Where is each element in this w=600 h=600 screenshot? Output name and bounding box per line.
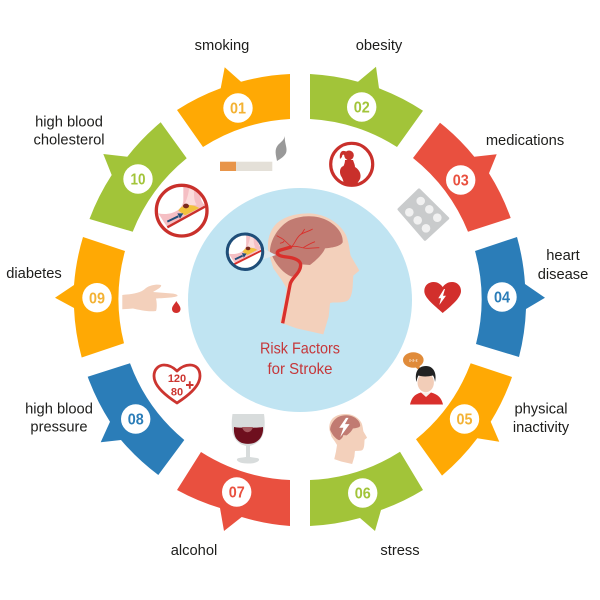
segment 10: high blood cholesterol: 10 — [130, 172, 146, 189]
segment 01: smoking: 01 — [230, 101, 246, 118]
segment 07: alcohol — [177, 452, 290, 531]
label: heart disease — [538, 248, 588, 283]
label: alcohol: alcohol — [171, 543, 217, 559]
icon: cigarette — [220, 136, 287, 171]
icon: finger with blood drop — [122, 285, 180, 313]
label: physical inactivity — [513, 402, 570, 436]
segment 10: high blood cholesterol — [90, 122, 187, 232]
segment 09: diabetes: 09 — [89, 290, 105, 307]
title: Risk Factors — [260, 340, 340, 357]
segment 07: alcohol: 07 — [229, 485, 245, 502]
label: high blood pressure: pressure — [30, 420, 88, 436]
segment 08: high blood pressure: 08 — [128, 412, 144, 429]
icon: wine glass — [232, 414, 265, 464]
label: high blood cholesterol: cholesterol — [33, 132, 105, 148]
zoom wedge — [264, 249, 276, 259]
segment 03: medications: 03 — [453, 173, 469, 190]
segment 04: heart disease: 04 — [494, 290, 510, 307]
segment 01: smoking — [177, 67, 290, 147]
label: medications: medications — [486, 133, 564, 149]
segment 02: obesity — [310, 67, 423, 147]
segment 09: diabetes — [55, 237, 125, 358]
icon: blood pressure heart: 80 — [171, 386, 183, 398]
icon: head with stressed brain — [329, 414, 367, 464]
label: heart disease: disease — [538, 267, 588, 283]
label: high blood pressure: high blood — [25, 401, 93, 417]
icon: artery crossed out — [156, 183, 207, 236]
label: high blood cholesterol: high blood — [35, 115, 103, 131]
icon: artery in navy circle — [227, 233, 263, 269]
label: obesity: obesity — [356, 38, 403, 54]
segment 08: high blood pressure — [88, 363, 184, 475]
label: high blood pressure — [25, 401, 93, 436]
icon: sleepy person: z-z-z — [409, 357, 418, 362]
title — [260, 340, 340, 378]
segment 05: physical inactivity: 05 — [456, 412, 473, 429]
segment 06: stress — [310, 452, 423, 531]
label: physical inactivity: physical — [514, 402, 568, 418]
segment 05: physical inactivity — [416, 363, 512, 476]
label: smoking: smoking — [195, 38, 249, 54]
icon: sleepy person — [403, 352, 443, 404]
segment 02: obesity: 02 — [354, 100, 370, 117]
icon: heart with lightning — [424, 282, 461, 313]
artery branches — [277, 229, 319, 248]
title: for Stroke — [268, 361, 333, 378]
artery illustration — [158, 183, 207, 227]
label: physical inactivity: inactivity — [513, 420, 570, 436]
label: diabetes: diabetes — [6, 266, 62, 282]
segment 04: heart disease — [475, 237, 545, 357]
label: stress: stress — [380, 543, 420, 559]
segment 03: medications — [413, 123, 511, 232]
label: high blood cholesterol — [33, 115, 105, 148]
icon: pill blister — [399, 190, 448, 239]
icon: blood pressure heart: 120 — [168, 373, 186, 385]
main artery — [277, 247, 301, 323]
head silhouette — [268, 213, 359, 334]
brain — [270, 216, 343, 277]
center circle — [188, 188, 412, 412]
icon: blood pressure heart — [154, 365, 200, 403]
artery illustration — [229, 236, 262, 265]
label: heart disease: heart — [546, 248, 580, 264]
central head with brain and arteries — [264, 213, 359, 334]
segment 06: stress: 06 — [355, 486, 371, 503]
icon: obese person in circle — [331, 143, 373, 188]
